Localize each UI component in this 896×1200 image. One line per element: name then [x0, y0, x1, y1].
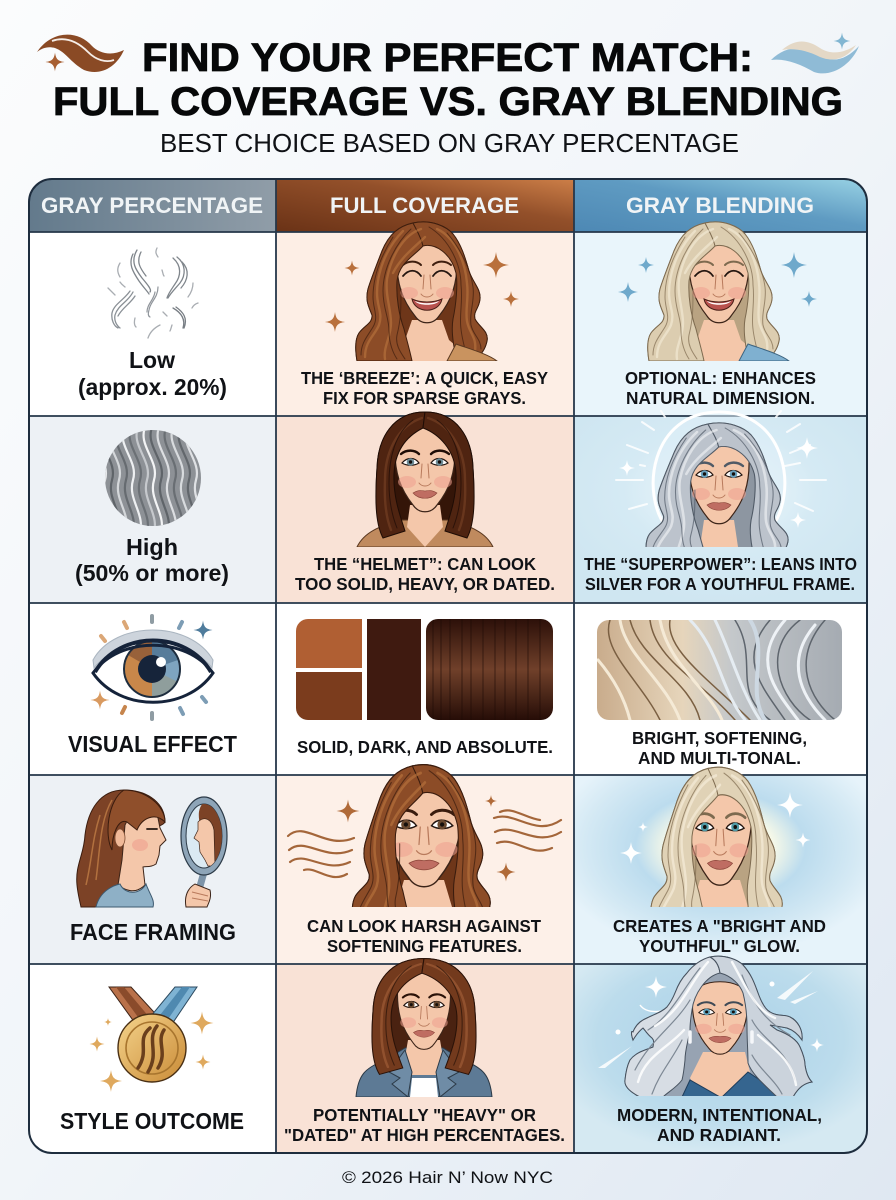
icon: eye [90, 616, 213, 719]
heading: FIND YOUR PERFECT MATCH: [142, 36, 753, 80]
cell: full coverage, style outcome [284, 958, 565, 1145]
portrait: dark solid bob [357, 412, 493, 547]
caption [632, 728, 807, 768]
cell: gray blending, high [584, 411, 857, 594]
caption: POTENTIALLY "HEAVY" OR [313, 1105, 536, 1125]
caption: THE “SUPERPOWER”: LEANS INTO [584, 554, 857, 574]
column header: gray blending: GRAY BLENDING [626, 193, 814, 218]
column header: gray percentage: GRAY PERCENTAGE [41, 193, 263, 218]
heading: FULL COVERAGE VS. GRAY BLENDING [53, 80, 843, 124]
caption: YOUTHFUL" GLOW. [639, 936, 800, 956]
cell: gray blending, style outcome [598, 956, 824, 1145]
cell: gray blending, face framing [613, 767, 826, 956]
row label: low gray [78, 248, 227, 400]
caption [617, 1105, 822, 1145]
portrait: brunette bob with blazer [356, 958, 492, 1097]
halo and rays [616, 411, 826, 528]
caption: SOFTENING FEATURES. [327, 936, 522, 956]
heading [53, 36, 843, 124]
row label: face framing [70, 790, 236, 945]
caption [625, 368, 816, 408]
row label text: style outcome: STYLE OUTCOME [60, 1108, 244, 1134]
caption: MODERN, INTENTIONAL, [617, 1105, 822, 1125]
caption: THE ‘BREEZE’: A QUICK, EASY [301, 368, 548, 388]
cell: full coverage, face framing [288, 765, 561, 956]
caption: AND RADIANT. [657, 1125, 781, 1145]
row label: visual effect [68, 616, 237, 757]
caption: BRIGHT, SOFTENING, [632, 728, 807, 748]
caption: AND MULTI-TONAL. [638, 748, 801, 768]
icon: gray hair swatch circle [105, 430, 201, 526]
caption: NATURAL DIMENSION. [626, 388, 815, 408]
row label text: visual effect: VISUAL EFFECT [68, 731, 237, 757]
caption: OPTIONAL: ENHANCES [625, 368, 816, 388]
cell: full coverage, low [301, 222, 548, 408]
caption [301, 368, 548, 408]
caption: FIX FOR SPARSE GRAYS. [323, 388, 526, 408]
row label text: high [75, 534, 229, 586]
portrait: silver hair [646, 423, 788, 562]
subtitle: BEST CHOICE BASED ON GRAY PERCENTAGE [160, 128, 739, 158]
cell: full coverage, visual effect [296, 619, 553, 757]
sparkles [618, 252, 817, 307]
caption: TOO SOLID, HEAVY, OR DATED. [295, 574, 555, 594]
column header: full coverage: FULL COVERAGE [330, 193, 519, 218]
header row [41, 193, 814, 218]
caption: "DATED" AT HIGH PERCENTAGES. [284, 1125, 565, 1145]
wind lines [288, 810, 561, 877]
caption: CREATES A "BRIGHT AND [613, 916, 826, 936]
portrait: windswept silver hair [625, 956, 812, 1097]
row label text: low [78, 347, 227, 400]
caption [284, 1105, 565, 1145]
table background and grid [29, 179, 867, 1153]
portrait: smiling brunette [356, 222, 497, 361]
row label text: low: Low [129, 347, 175, 373]
portrait: glowing blonde [650, 766, 783, 907]
icon: woman looking in mirror [77, 790, 227, 907]
row label text: high: (50% or more) [75, 560, 229, 586]
footer copyright: © 2026 Hair N’ Now NYC [342, 1169, 553, 1187]
icon: blue hair wave [771, 32, 859, 73]
caption [295, 554, 555, 594]
row label text: low: (approx. 20%) [78, 374, 227, 400]
cell: full coverage, high [295, 412, 555, 594]
portrait: smiling blonde [648, 222, 789, 361]
caption [613, 916, 826, 956]
sparkles and streaks [598, 971, 824, 1068]
icon: brown hair wave [37, 35, 124, 72]
cell: gray blending, low [618, 222, 817, 408]
icon: gold medal [90, 987, 214, 1092]
row label text: face framing: FACE FRAMING [70, 919, 236, 945]
row label: style outcome [60, 987, 244, 1134]
portrait: brunette with defined features [352, 764, 491, 907]
sparkles [336, 795, 516, 882]
sparkles [325, 252, 519, 332]
caption [307, 916, 541, 956]
row label: high gray [75, 425, 229, 586]
caption: SILVER FOR A YOUTHFUL FRAME. [585, 574, 855, 594]
row label text: high: High [126, 534, 178, 560]
sparkles [620, 792, 810, 864]
caption: SOLID, DARK, AND ABSOLUTE. [297, 737, 553, 757]
icon: sparse gray wisps [108, 248, 198, 338]
caption: CAN LOOK HARSH AGAINST [307, 916, 541, 936]
blended hair swatch [597, 620, 842, 720]
cell: gray blending, visual effect [597, 620, 842, 768]
color swatches [296, 619, 553, 720]
title block [37, 32, 859, 158]
caption: THE “HELMET”: CAN LOOK [314, 554, 536, 574]
caption [584, 554, 857, 594]
